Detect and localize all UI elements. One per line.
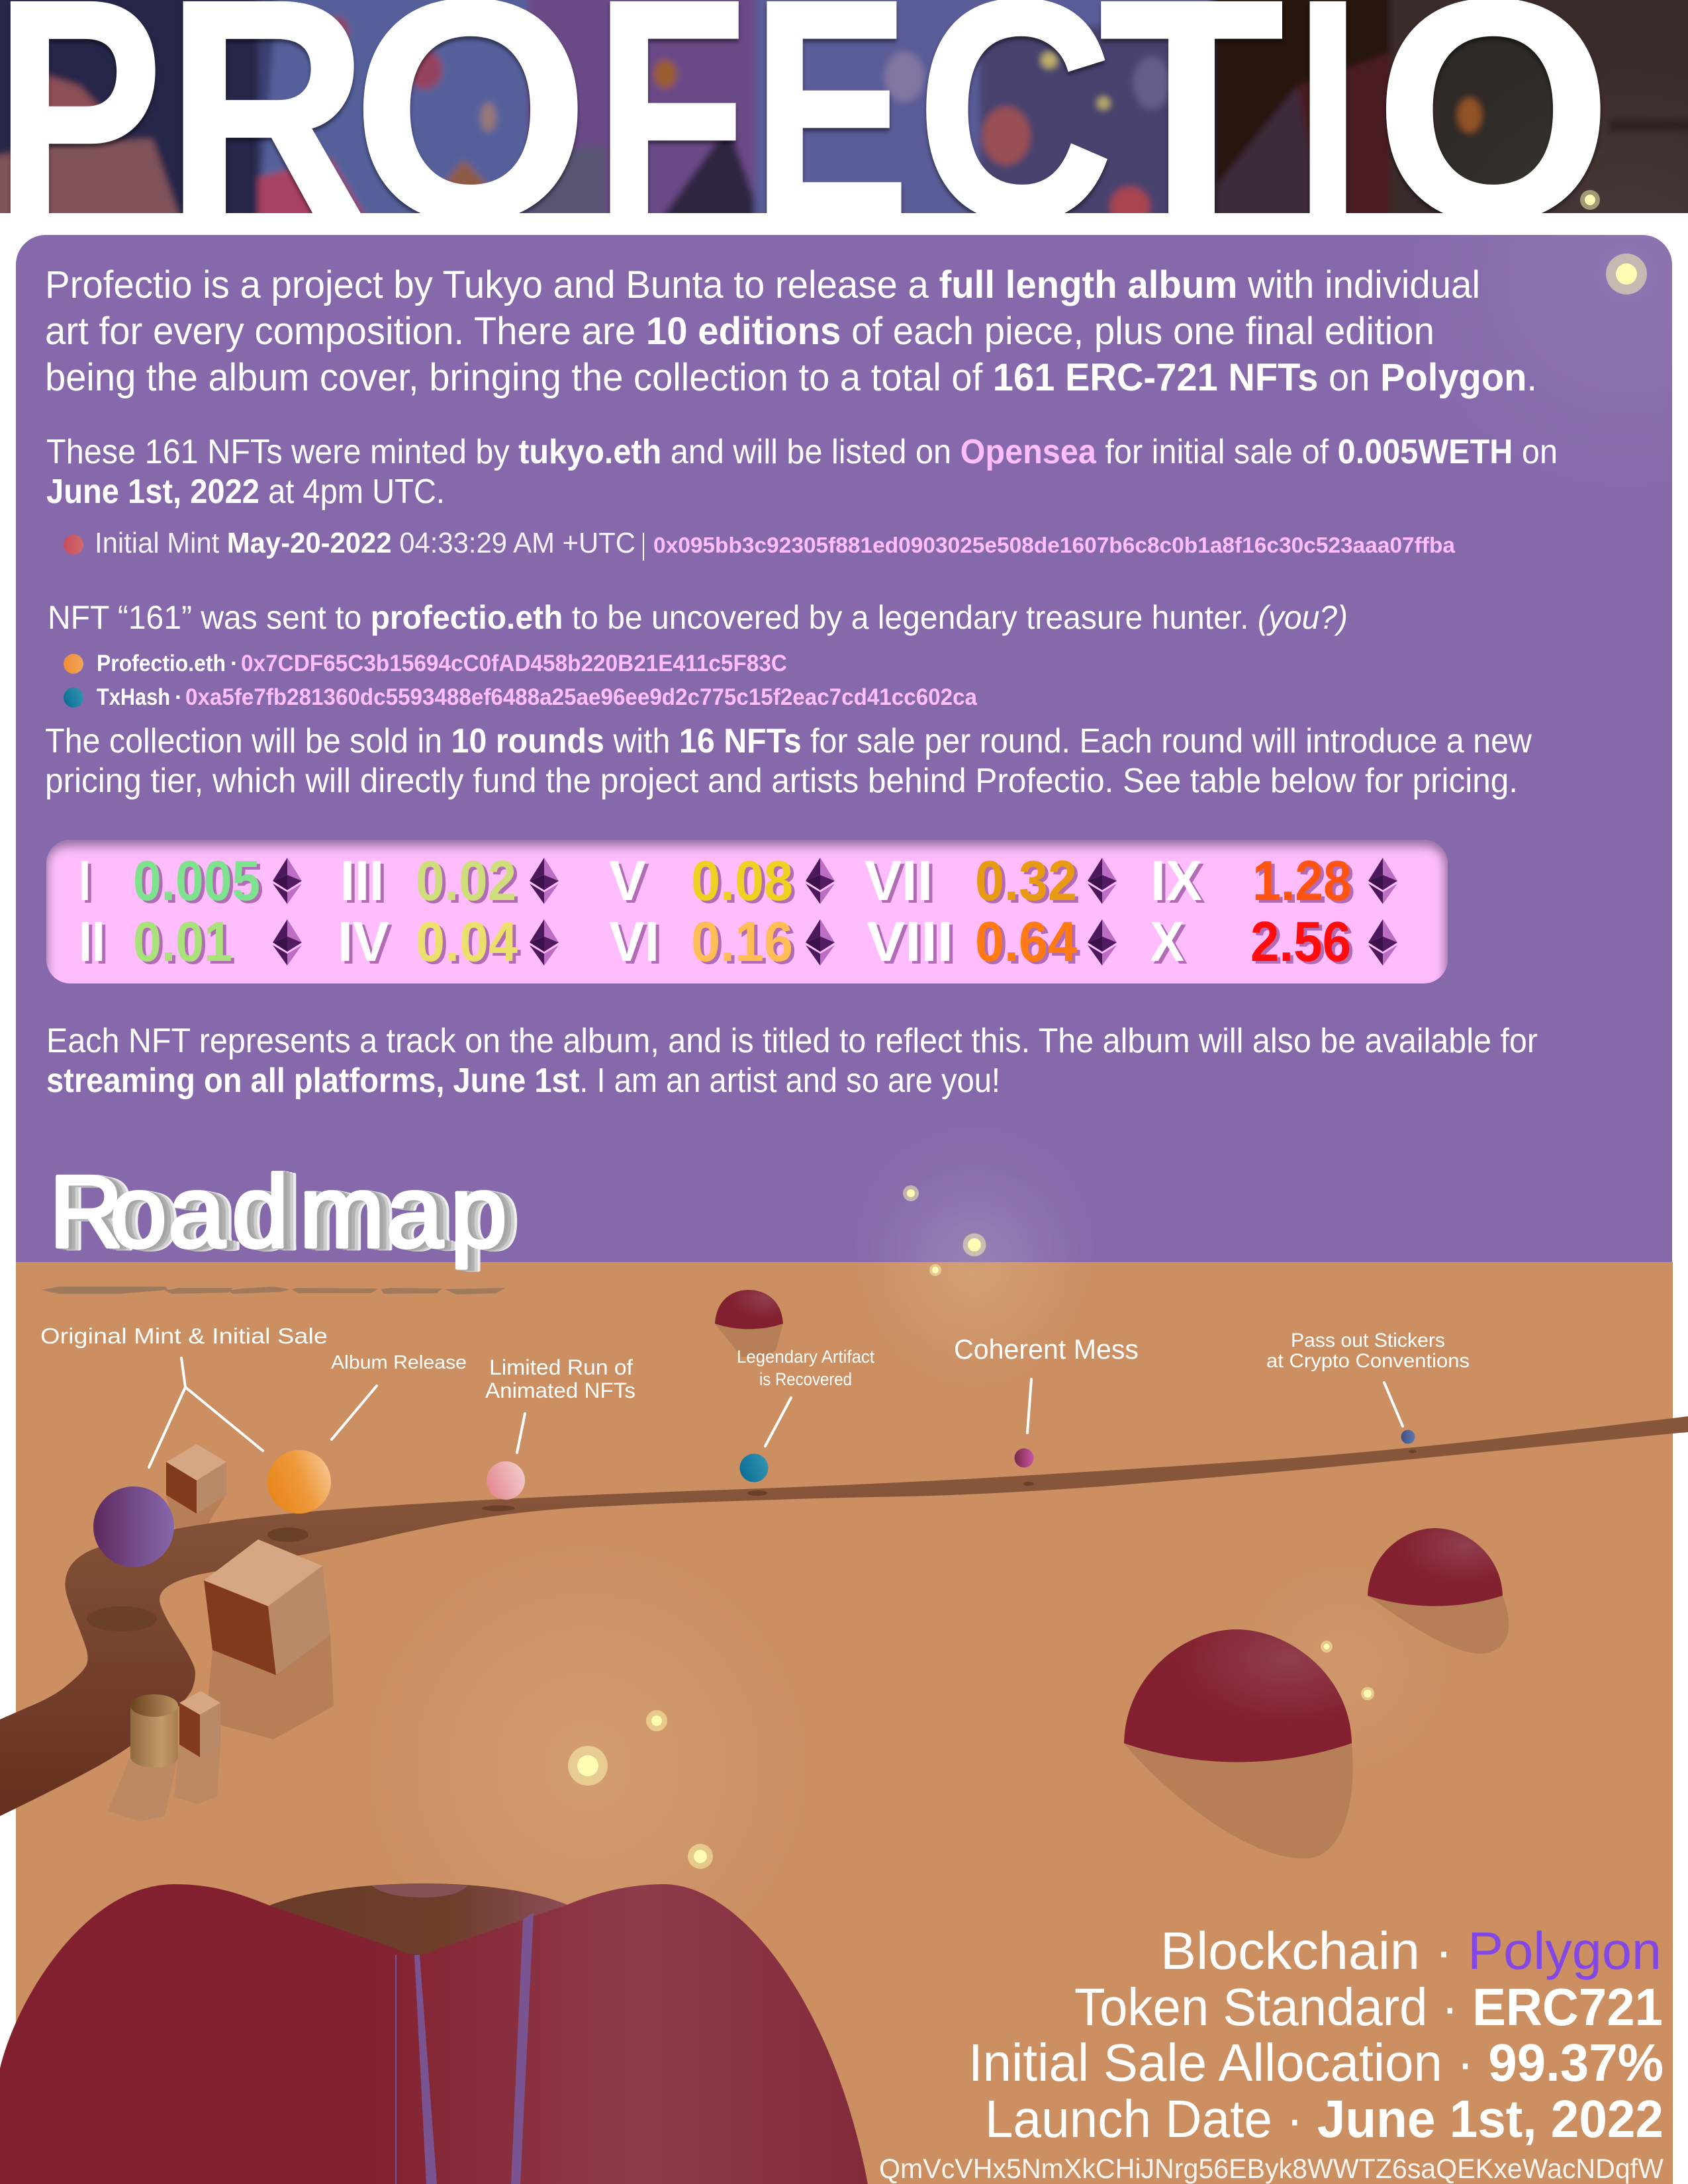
milestone labels: is Recovered bbox=[759, 1369, 852, 1389]
header banner bbox=[0, 0, 1688, 213]
TxHash: 0xa5fe7fb281360dc5593488ef6488a25ae96ee9d2c775c15f2eac7cd41cc602ca bbox=[185, 684, 977, 710]
initial mint record: 0x095bb3c92305f881ed0903025e508de1607b6c8c0b1a8f16c30c523aaa07ffba bbox=[653, 533, 1456, 557]
milestone labels: Album Release bbox=[331, 1352, 467, 1373]
mound: large bbox=[1124, 1629, 1353, 1858]
pricing table values: 0.01 bbox=[133, 911, 232, 974]
firefly orbs bbox=[568, 1185, 1374, 1869]
rounds text bbox=[45, 722, 1532, 800]
pricing table values: VIII bbox=[867, 911, 953, 974]
pricing table values bbox=[79, 850, 1352, 974]
project facts: Blockchain · Polygon bbox=[1160, 1921, 1662, 1980]
closing paragraph bbox=[46, 1022, 1538, 1100]
pricing table values: 1.28 bbox=[1252, 850, 1352, 913]
ground bbox=[16, 1262, 1673, 2184]
icon: ethereum diamonds bbox=[273, 858, 1397, 966]
pricing table values: 0.005 bbox=[133, 850, 260, 913]
milestone labels: Limited Run of bbox=[489, 1355, 633, 1379]
project facts: Launch Date · June 1st, 2022 bbox=[985, 2089, 1664, 2148]
header background art bbox=[0, 0, 1688, 226]
road bbox=[0, 1416, 1688, 1816]
milestone labels: Legendary Artifact bbox=[737, 1347, 874, 1367]
roadmap heading: Roadmap bbox=[49, 1154, 507, 1269]
road stop shadows bbox=[87, 1449, 1417, 1631]
roadmap shadow bbox=[41, 1287, 505, 1295]
pricing table values: III bbox=[340, 850, 384, 913]
pricing table values: 0.04 bbox=[416, 911, 518, 974]
title bbox=[9, 0, 1601, 213]
minting text bbox=[46, 433, 1558, 511]
rounds text: The collection will be sold in 10 rounds with 16 NFTs for sale per round. Each round will introduce a new bbox=[45, 722, 1532, 760]
closing paragraph: Each NFT represents a track on the album, and is titled to reflect this. The album will also be available for bbox=[46, 1022, 1538, 1060]
pricing table values: VII bbox=[865, 850, 933, 913]
intro text: art for every composition. There are 10 editions of each piece, plus one final edition bbox=[45, 310, 1434, 353]
milestone labels: Original Mint & Initial Sale bbox=[40, 1324, 328, 1348]
sky glow bbox=[849, 1119, 1100, 1390]
mound: medium bbox=[1368, 1528, 1509, 1654]
milestone balls bbox=[93, 1430, 1415, 1567]
pricing table bbox=[46, 840, 1448, 983]
milestone labels: Pass out Stickers bbox=[1291, 1330, 1445, 1351]
milestone labels bbox=[40, 1324, 1470, 1402]
milestone leader lines bbox=[149, 1358, 1403, 1467]
project facts: QmVcVHx5NmXkCHiJNrg56EByk8WWTZ6saQEKxeWacNDqfW bbox=[879, 2153, 1664, 2184]
initial mint record: Initial Mint May-20-2022 04:33:29 AM +UTC bbox=[95, 527, 635, 559]
rounds text: pricing tier, which will directly fund the project and artists behind Profectio. See table below for pricing. bbox=[45, 762, 1518, 800]
cylinder and tiny cube bbox=[108, 1691, 220, 1821]
closing paragraph: streaming on all platforms, June 1st. I am an artist and so are you! bbox=[46, 1062, 1000, 1100]
pricing table values: VI bbox=[609, 911, 659, 974]
project facts: Initial Sale Allocation · 99.37% bbox=[968, 2033, 1664, 2092]
minting text: June 1st, 2022 at 4pm UTC. bbox=[46, 473, 445, 511]
pricing table values: IV bbox=[338, 911, 389, 974]
profectio.eth address: · bbox=[230, 651, 238, 676]
small cube shadow bbox=[166, 1496, 225, 1529]
profectio.eth address: Profectio.eth bbox=[97, 651, 226, 676]
pricing table values: 0.16 bbox=[691, 911, 793, 974]
profectio.eth address: 0x7CDF65C3b15694cC0fAD458b220B21E411c5F83C bbox=[241, 651, 787, 676]
milestone labels: Animated NFTs bbox=[485, 1379, 635, 1402]
project facts bbox=[879, 1921, 1664, 2184]
drip lines bbox=[395, 1913, 534, 2184]
pricing table values: X bbox=[1150, 911, 1184, 974]
pricing table values: 2.56 bbox=[1250, 911, 1351, 974]
pricing table values: 0.32 bbox=[975, 850, 1077, 913]
pricing table values: 0.08 bbox=[691, 850, 793, 913]
initial mint record bbox=[64, 527, 1456, 561]
ground glow bbox=[363, 1541, 1450, 1991]
intro text: Profectio is a project by Tukyo and Bunta to release a full length album with individual bbox=[45, 263, 1480, 306]
project facts: Token Standard · ERC721 bbox=[1074, 1978, 1663, 2036]
roadmap heading: Roadmap bbox=[49, 1154, 507, 1269]
pricing table values: V bbox=[609, 850, 646, 913]
milestone labels: at Crypto Conventions bbox=[1266, 1350, 1470, 1372]
pricing table values: I bbox=[79, 850, 91, 913]
big cube bbox=[204, 1539, 334, 1739]
mound: far bbox=[715, 1290, 783, 1358]
pricing table values: II bbox=[79, 911, 105, 974]
pricing table values: IX bbox=[1150, 850, 1202, 913]
intro text: being the album cover, bringing the collection to a total of 161 ERC-721 NFTs on Polygon. bbox=[45, 356, 1537, 399]
foreground mound bbox=[0, 1884, 868, 2184]
panel: intro background bbox=[16, 49, 1688, 1264]
minting text: These 161 NFTs were minted by tukyo.eth and will be listed on Opensea for initial sale of 0.005WETH on bbox=[46, 433, 1558, 471]
small cube bbox=[166, 1444, 226, 1514]
milestone labels: Coherent Mess bbox=[954, 1334, 1139, 1365]
TxHash: TxHash bbox=[97, 684, 170, 710]
pricing table values: 0.64 bbox=[975, 911, 1077, 974]
NFT 161 text: NFT “161” was sent to profectio.eth to be uncovered by a legendary treasure hunter. (you?) bbox=[48, 599, 1348, 636]
header orb bbox=[1580, 190, 1600, 210]
intro text bbox=[45, 263, 1537, 399]
pricing table values: 0.02 bbox=[416, 850, 516, 913]
TxHash: · bbox=[175, 684, 183, 710]
